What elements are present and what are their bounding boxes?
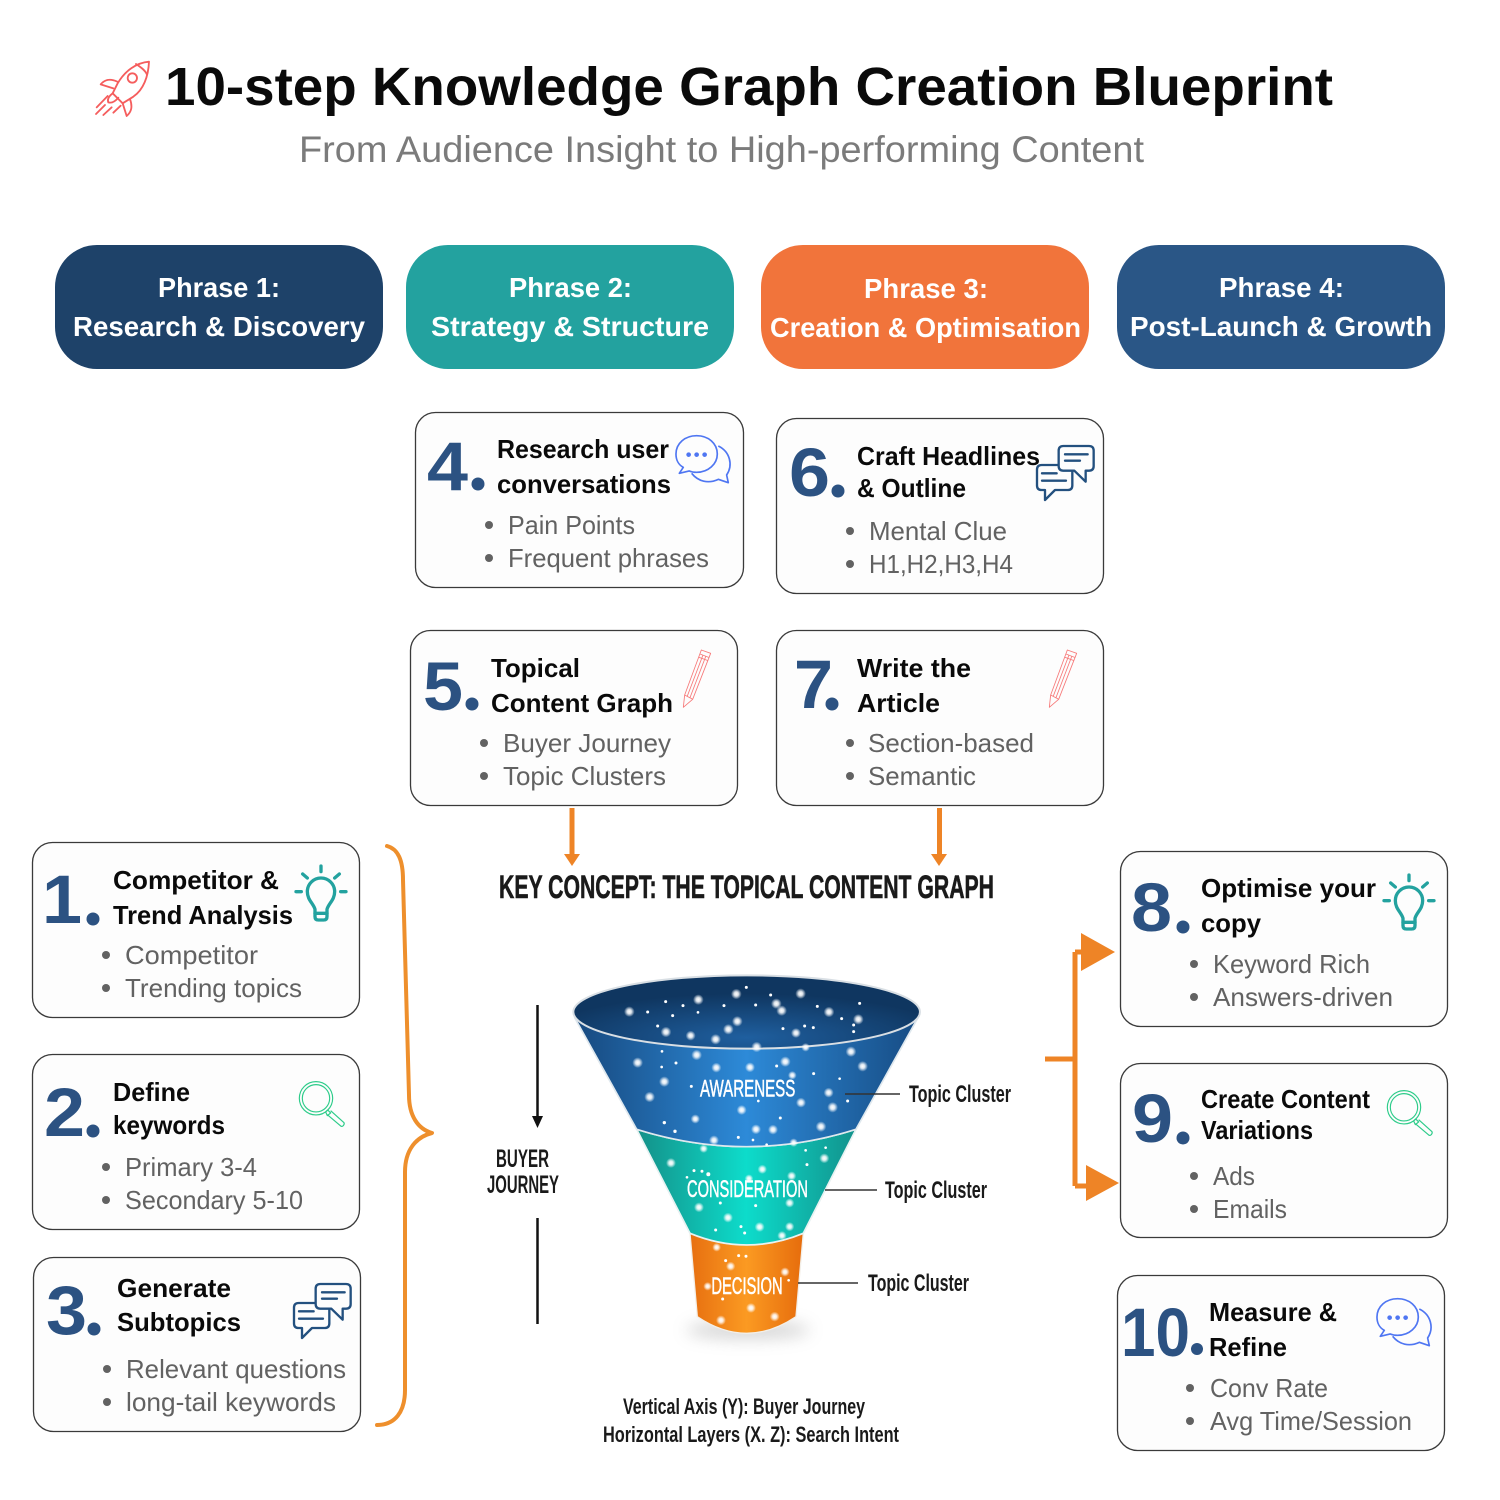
panel: step 5: 5 bbox=[423, 648, 463, 725]
panel: step 8: Optimise your bbox=[1201, 873, 1376, 903]
bracket: steps 1 to 3 bbox=[377, 846, 432, 1425]
icon: message bubbles bbox=[1037, 446, 1094, 500]
topic cluster label: consideration: Topic Cluster bbox=[885, 1177, 987, 1204]
panel: step 5: Topic Clusters bbox=[503, 761, 666, 791]
funnel label: awareness: AWARENESS bbox=[700, 1076, 795, 1103]
icon: magnifier bbox=[299, 1082, 344, 1126]
panel: step 3: long-tail keywords bbox=[126, 1387, 336, 1417]
icon: pencil bbox=[683, 650, 711, 707]
buyer journey axis bbox=[487, 1005, 559, 1324]
panel: step 6: H1,H2,H3,H4 bbox=[869, 549, 1013, 579]
funnel dots bbox=[646, 986, 861, 1300]
panel: step 2: Define bbox=[113, 1077, 190, 1107]
axis caption: Horizontal Layers (X. Z): Search Intent bbox=[603, 1422, 899, 1447]
axis caption bbox=[603, 1394, 899, 1447]
panel: step 10: Refine bbox=[1209, 1332, 1287, 1362]
panel: step 9: Emails bbox=[1213, 1194, 1287, 1224]
subtitle: From Audience Insight to High-performing Content bbox=[299, 129, 1145, 170]
panel: step 3: Subtopics bbox=[117, 1307, 241, 1337]
panel: step 6: & Outline bbox=[857, 473, 966, 503]
key concept heading: KEY CONCEPT: THE TOPICAL CONTENT GRAPH bbox=[499, 869, 994, 905]
panel: step 1: Trending topics bbox=[125, 973, 302, 1003]
axis caption: Vertical Axis (Y): Buyer Journey bbox=[623, 1394, 866, 1419]
panel: step 8 bbox=[1120, 852, 1448, 1026]
panel: step 8: Keyword Rich bbox=[1213, 949, 1370, 979]
funnel layer: decision bbox=[690, 1233, 803, 1333]
icon: light bulb bbox=[296, 866, 346, 920]
panel: phase 2 header: Phrase 2: bbox=[509, 272, 632, 303]
title: 10-step Knowledge Graph Creation Blueprint bbox=[165, 57, 1333, 117]
panel: phase 3 header: Creation & Optimisation bbox=[770, 312, 1081, 343]
panel: step 4: Frequent phrases bbox=[508, 543, 709, 573]
panel: step 7: Article bbox=[857, 688, 940, 718]
panel: phase 3 header: Phrase 3: bbox=[864, 273, 988, 304]
panel: step 3: Generate bbox=[117, 1273, 231, 1303]
panel: step 7: Semantic bbox=[868, 761, 976, 791]
arrow: step 5 to funnel bbox=[564, 808, 580, 866]
panel: step 4: conversations bbox=[497, 469, 671, 499]
icon: magnifier bbox=[1387, 1091, 1432, 1135]
panel: step 7: 7 bbox=[794, 646, 833, 723]
panel: step 4: Pain Points bbox=[508, 510, 635, 540]
panel: step 4: 4 bbox=[427, 428, 468, 505]
panel: step 9 bbox=[1120, 1064, 1448, 1238]
panel: phase 1 header bbox=[55, 245, 383, 369]
panel: step 5 bbox=[410, 630, 738, 806]
funnel opening bbox=[573, 975, 920, 1049]
panel: step 4: Research user bbox=[497, 434, 669, 464]
panel: step 2 bbox=[32, 1054, 360, 1230]
panel: step 6 bbox=[776, 418, 1104, 594]
panel: step 8: 8 bbox=[1131, 869, 1172, 946]
panel: step 3 bbox=[34, 1258, 360, 1432]
funnel stars bbox=[624, 988, 868, 1325]
panel: step 10: 10 bbox=[1121, 1294, 1190, 1371]
panel: step 1: 1 bbox=[42, 861, 82, 938]
icon: message bubbles bbox=[294, 1284, 351, 1338]
panel: step 1: Trend Analysis bbox=[113, 900, 293, 930]
panel: step 1 bbox=[32, 842, 360, 1018]
panel: step 8: copy bbox=[1201, 908, 1262, 938]
panel: step 10: Avg Time/Session bbox=[1210, 1406, 1412, 1436]
panel: step 5: Content Graph bbox=[491, 688, 673, 718]
panel: step 6: Craft Headlines bbox=[857, 441, 1040, 471]
panel: step 7: Section-based bbox=[868, 728, 1034, 758]
panel: step 7: Write the bbox=[857, 653, 971, 683]
panel: step 10: Conv Rate bbox=[1210, 1373, 1328, 1403]
panel: step 9: Create Content bbox=[1201, 1084, 1370, 1114]
funnel chart bbox=[573, 975, 920, 1339]
funnel layer: awareness bbox=[575, 1018, 918, 1147]
funnel label: decision: DECISION bbox=[711, 1273, 783, 1300]
panel: step 10 bbox=[1118, 1276, 1444, 1450]
icon: light bulb bbox=[1384, 875, 1434, 929]
buyer journey axis: BUYER bbox=[496, 1145, 549, 1173]
panel: phase 4 header: Phrase 4: bbox=[1219, 272, 1344, 303]
panel: step 10: Measure & bbox=[1209, 1297, 1337, 1327]
panel: step 4 bbox=[416, 412, 744, 588]
panel: step 5: Topical bbox=[491, 653, 580, 683]
topic cluster label: awareness: Topic Cluster bbox=[909, 1081, 1011, 1108]
panel: step 6: 6 bbox=[789, 434, 830, 511]
panel: phase 1 header: Phrase 1: bbox=[158, 272, 280, 303]
panel: phase 1 header: Research & Discovery bbox=[73, 311, 365, 342]
panel: step 1: Competitor bbox=[125, 940, 258, 970]
icon: pencil bbox=[1049, 650, 1077, 707]
panel: step 3: 3 bbox=[46, 1272, 87, 1349]
arrow: funnel to steps 8 and 9 bbox=[1045, 933, 1119, 1201]
panel: phase 4 header bbox=[1117, 245, 1445, 369]
panel: step 7 bbox=[776, 630, 1104, 806]
panel: phase 4 header: Post-Launch & Growth bbox=[1130, 311, 1432, 342]
panel: step 2: keywords bbox=[113, 1110, 225, 1140]
panel: step 9: Variations bbox=[1201, 1115, 1313, 1145]
buyer journey axis: JOURNEY bbox=[487, 1171, 559, 1199]
panel: step 2: Primary 3-4 bbox=[125, 1152, 257, 1182]
panel: step 3: Relevant questions bbox=[126, 1354, 346, 1384]
panel: step 2: Secondary 5-10 bbox=[125, 1185, 303, 1215]
arrow: step 7 to funnel bbox=[931, 808, 947, 866]
panel: step 8: Answers-driven bbox=[1213, 982, 1393, 1012]
panel: step 2: 2 bbox=[44, 1074, 85, 1151]
topic cluster label: decision: Topic Cluster bbox=[868, 1270, 969, 1297]
panel: phase 2 header: Strategy & Structure bbox=[431, 311, 709, 342]
panel: step 9: 9 bbox=[1132, 1080, 1173, 1157]
funnel layer: consideration bbox=[637, 1129, 856, 1245]
panel: step 6: Mental Clue bbox=[869, 516, 1007, 546]
icon: chat bubbles bbox=[676, 436, 730, 483]
icon: rocket bbox=[96, 62, 149, 116]
funnel label: consideration: CONSIDERATION bbox=[687, 1176, 808, 1203]
panel: phase 2 header bbox=[406, 245, 734, 369]
panel: phase 3 header bbox=[761, 245, 1089, 369]
panel: step 5: Buyer Journey bbox=[503, 728, 671, 758]
panel: step 9: Ads bbox=[1213, 1161, 1255, 1191]
panel: step 1: Competitor & bbox=[113, 865, 279, 895]
icon: chat bubbles bbox=[1377, 1299, 1431, 1346]
